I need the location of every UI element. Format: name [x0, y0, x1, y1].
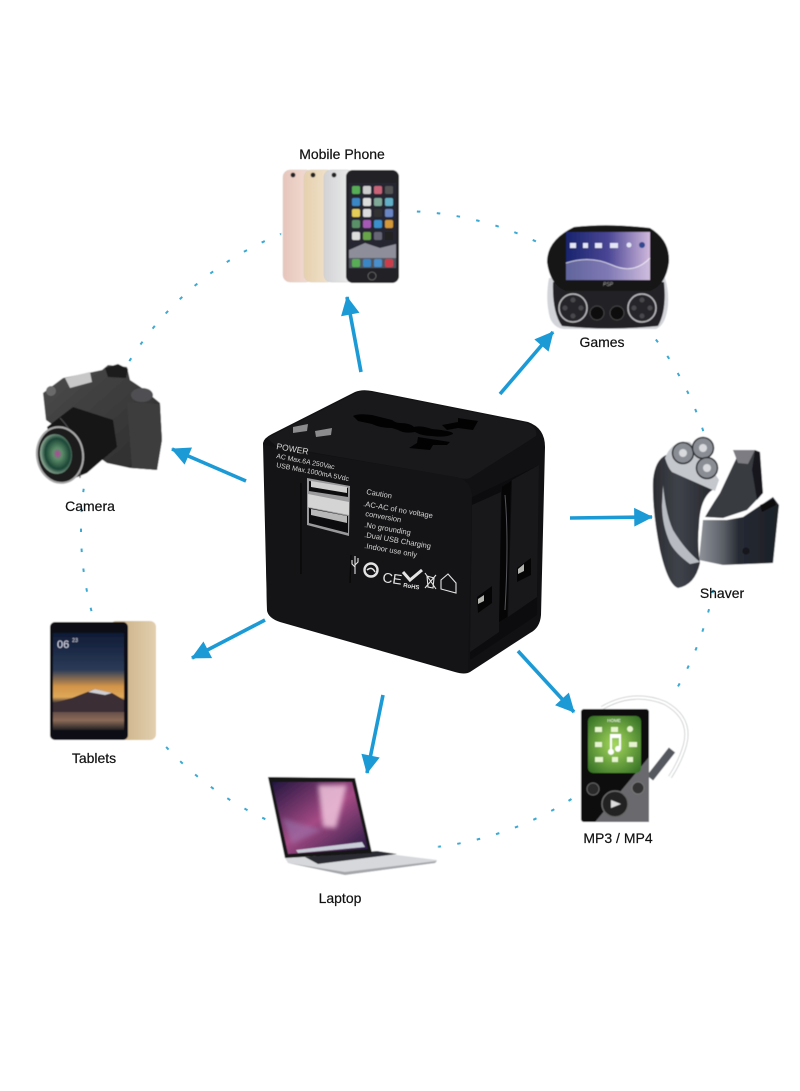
- arrow to shaver: [570, 517, 652, 518]
- device: laptop: [266, 774, 438, 876]
- power rating text: POWER: [276, 441, 309, 457]
- caution text: .AC-AC of no voltage: [363, 499, 434, 520]
- adapter slider tabs: [293, 424, 332, 437]
- caution text: .No grounding: [364, 520, 412, 537]
- label: camera: Camera: [65, 498, 115, 514]
- arrow to camera: [172, 449, 246, 481]
- device: camera: [33, 363, 164, 486]
- device: MP3 player with headphones: HOME: [607, 718, 621, 723]
- certification icons: RoHS: [403, 583, 420, 592]
- side pin holes: [477, 558, 531, 613]
- device: MP3 player with headphones: [580, 694, 698, 824]
- certification icons: CE: [382, 569, 403, 588]
- device: shaver with charging dock: [652, 436, 782, 590]
- power rating text: [276, 441, 350, 483]
- caution text: .Indoor use only: [364, 541, 418, 559]
- device: tablet: 06: [57, 639, 69, 651]
- device: mobile phones: [281, 168, 401, 285]
- arrow to tablets: [192, 620, 265, 658]
- adapter side face: [470, 465, 539, 660]
- device: game console: PSP: [603, 282, 614, 288]
- device: game console: [544, 223, 672, 329]
- device: tablet: 23: [72, 638, 78, 644]
- universal travel adapter: [263, 390, 545, 674]
- power rating text: USB Max.1000mA 5Vdc: [276, 462, 350, 483]
- label: games: Games: [579, 334, 625, 350]
- power rating text: AC Max.6A 250Vac: [276, 453, 336, 471]
- USB ports: [307, 478, 350, 536]
- dotted connection ring: [81, 211, 719, 849]
- adapter top socket: [353, 414, 478, 450]
- side slider channel: [499, 481, 511, 622]
- caution text: [363, 487, 434, 559]
- arrow to games: [500, 332, 553, 394]
- caution text: Caution: [366, 487, 393, 500]
- arrow to laptop: [367, 695, 383, 773]
- adapter front face: [264, 445, 472, 672]
- label: shaver: Shaver: [700, 585, 745, 601]
- label: tablets: Tablets: [72, 750, 116, 766]
- slider groove: [301, 483, 351, 583]
- caution text: conversion: [365, 509, 402, 524]
- label: laptop: Laptop: [319, 890, 362, 906]
- label: MP3 / MP4: MP3 / MP4: [583, 830, 653, 846]
- arrows from adapter to devices: [172, 297, 652, 773]
- device: tablet: [48, 620, 158, 743]
- certification icons: [352, 556, 456, 593]
- label: mobile phone: Mobile Phone: [299, 146, 385, 162]
- adapter body silhouette: [263, 390, 545, 674]
- adapter top face: [267, 391, 536, 479]
- arrow to phone: [347, 297, 361, 372]
- arrow to MP3: [518, 651, 574, 712]
- caution text: .Dual USB Charging: [364, 530, 432, 551]
